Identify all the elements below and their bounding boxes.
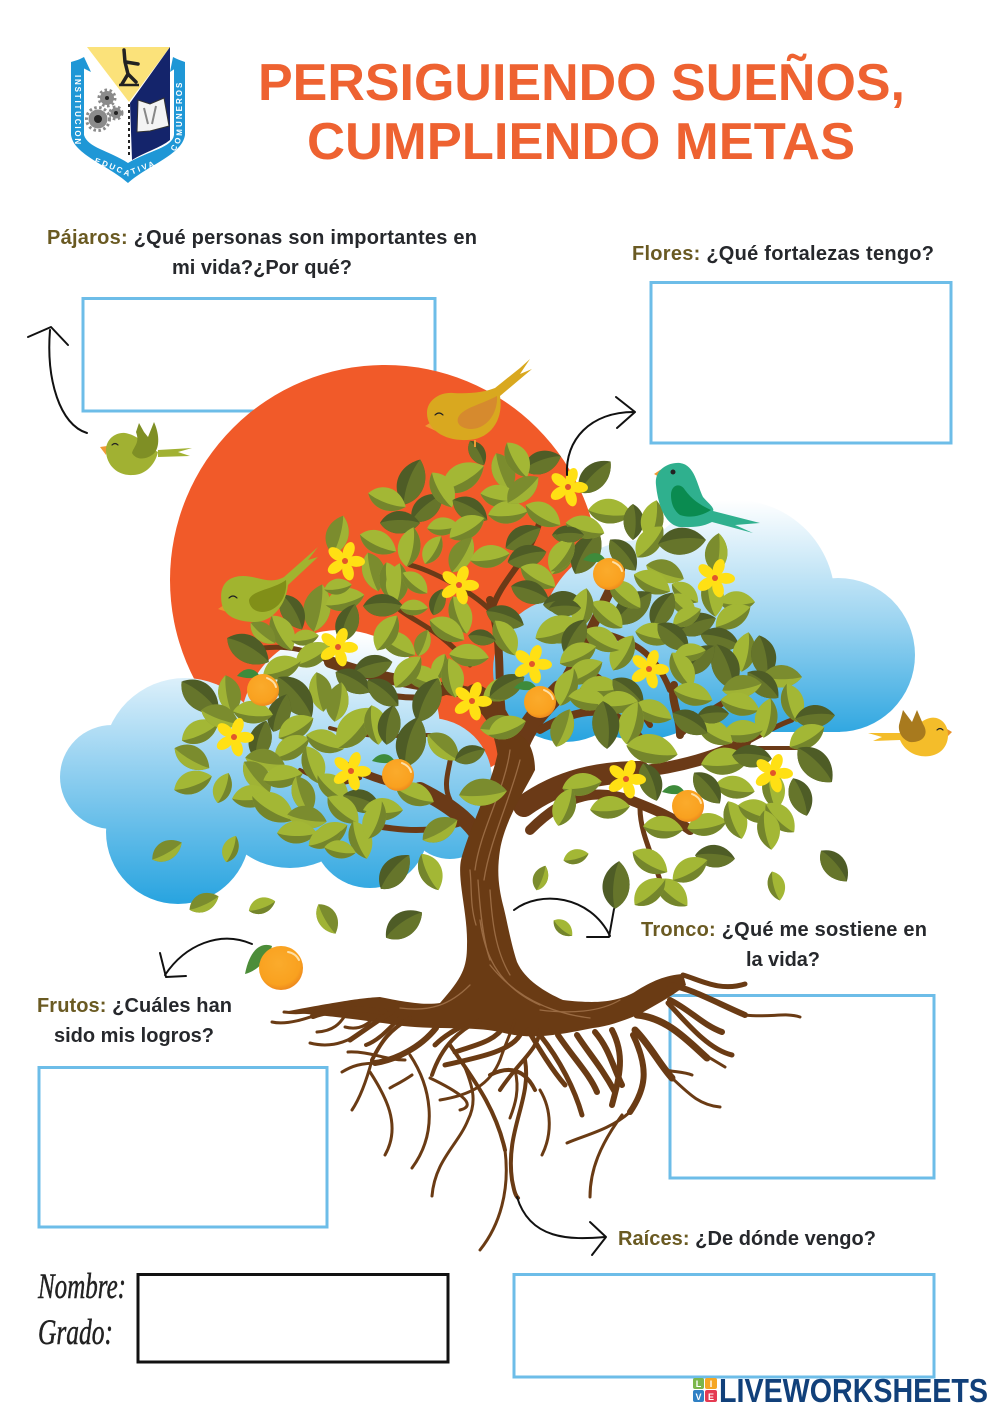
falling leaves (147, 833, 856, 947)
cloud: left (60, 630, 494, 904)
question: pájaros: Pájaros: ¿Qué personas son importantes en (47, 227, 477, 249)
student labels (37, 1266, 126, 1352)
liveworksheets logo: V (695, 1392, 702, 1402)
arrow: tronco (514, 899, 614, 937)
arrow: frutos (160, 939, 252, 977)
bird: yellow, right (868, 710, 952, 756)
sun (170, 365, 600, 795)
student labels: Nombre: (37, 1266, 126, 1306)
school crest logo: EDUCATIVA (95, 158, 154, 176)
question: frutos (37, 995, 232, 1047)
student labels: Grado: (38, 1312, 113, 1352)
bird: gold, top (425, 359, 532, 447)
school crest logo: INSTITUCION (75, 76, 81, 144)
answer box: tronco (670, 996, 934, 1178)
title (258, 53, 905, 171)
answer box: flores (651, 282, 951, 443)
question: frutos: Frutos: ¿Cuáles han (37, 995, 232, 1017)
question: tronco: la vida? (746, 949, 820, 971)
arrow: pájaros (28, 327, 87, 433)
school crest logo: COMUNEROS (171, 83, 182, 150)
trunk and root crown (283, 733, 686, 1036)
liveworksheets logo: E (708, 1392, 714, 1402)
arrow: raíces (517, 1197, 606, 1255)
flowers (214, 466, 793, 800)
tree (169, 437, 842, 1250)
school crest logo (71, 47, 185, 183)
branches (262, 520, 800, 880)
bird: olive, far left (100, 422, 192, 475)
roots (272, 975, 800, 1250)
answer box: pájaros (83, 298, 435, 411)
bird: olive, on tree (218, 547, 318, 622)
title: CUMPLIENDO METAS (307, 113, 855, 171)
bird: teal (654, 463, 760, 533)
question: tronco: Tronco: ¿Qué me sostiene en (641, 919, 927, 941)
foliage (169, 437, 842, 914)
question: raíces: Raíces: ¿De dónde vengo? (618, 1228, 876, 1250)
question: pájaros (47, 227, 477, 279)
answer box: raíces (514, 1274, 934, 1377)
answer box: frutos (39, 1068, 327, 1227)
student name box (138, 1274, 448, 1362)
oranges on tree (237, 553, 704, 822)
arrow: flores (567, 397, 635, 475)
question: tronco (641, 919, 927, 971)
question: pájaros: mi vida?¿Por qué? (172, 257, 352, 279)
title: PERSIGUIENDO SUEÑOS, (258, 53, 905, 112)
question: flores: Flores: ¿Qué fortalezas tengo? (632, 243, 934, 265)
liveworksheets logo: I (710, 1379, 712, 1389)
bark highlights (400, 750, 620, 1018)
liveworksheets logo: L (696, 1379, 702, 1389)
question: frutos: sido mis logros? (54, 1025, 214, 1047)
cloud: right (493, 500, 915, 742)
big orange fruit (245, 945, 303, 990)
